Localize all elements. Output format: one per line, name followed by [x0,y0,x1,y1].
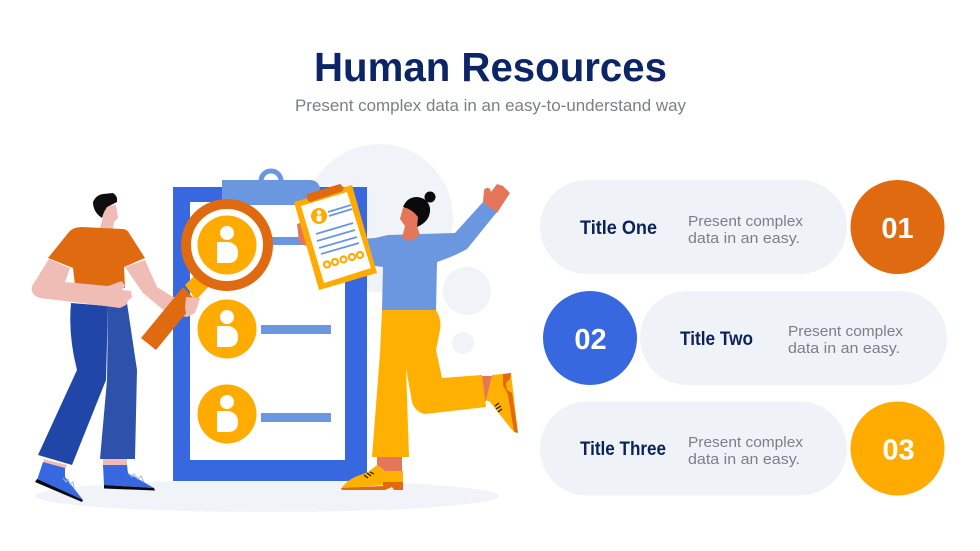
woman: trousers [372,310,486,457]
number badge 03 [850,402,944,496]
woman: kicked shoe [486,373,518,433]
description three: Present complex [688,434,804,451]
woman: raised hand [483,184,510,213]
woman: sweater [345,202,497,310]
document lines [316,205,359,254]
background blobs [35,144,499,512]
woman: neck and face [400,205,420,241]
man: neck and face [99,205,118,232]
heading: Title Three: Title Three [580,438,666,460]
woman: standing shoe [341,465,403,489]
description one: data in an easy. [688,230,800,247]
number badge 03: 03 [882,434,915,466]
illustration: HR recruiting scene [32,144,518,512]
candidate icon 3 [198,384,256,444]
description two: data in an easy. [788,340,900,357]
man: ankles [43,458,127,470]
subtitle: Present complex data in an easy-to-understand way [295,96,686,115]
candidate icon 2 [198,300,256,358]
title: Human Resources [314,44,667,90]
number badge 01 [850,180,944,274]
man: shirt [48,227,145,288]
document profile icon [311,208,327,224]
man: shoes [37,462,83,500]
description two: Present complex [788,323,904,340]
woman: ankles [377,455,402,471]
number badge 02: 02 [574,324,607,356]
rating stars [324,252,363,268]
number badge 02 [543,291,637,385]
panel: item two [543,291,947,385]
heading: Title Two: Title Two [680,328,753,350]
magnifying glass [141,204,268,350]
woman: hair [403,192,436,227]
hand holding document [297,222,310,246]
panel: item three [540,402,944,496]
man: legs [38,303,108,465]
held document [294,184,377,290]
clipboard [173,171,367,481]
panel: item one [540,180,944,274]
description one: Present complex [688,213,804,230]
number badge 01: 01 [881,213,914,245]
man: hair [93,193,117,218]
heading: Title One: Title One [580,217,657,239]
woman [341,184,518,490]
man [32,193,200,502]
man: right arm [125,260,200,317]
man: left arm [32,259,132,308]
description three: data in an easy. [688,451,800,468]
